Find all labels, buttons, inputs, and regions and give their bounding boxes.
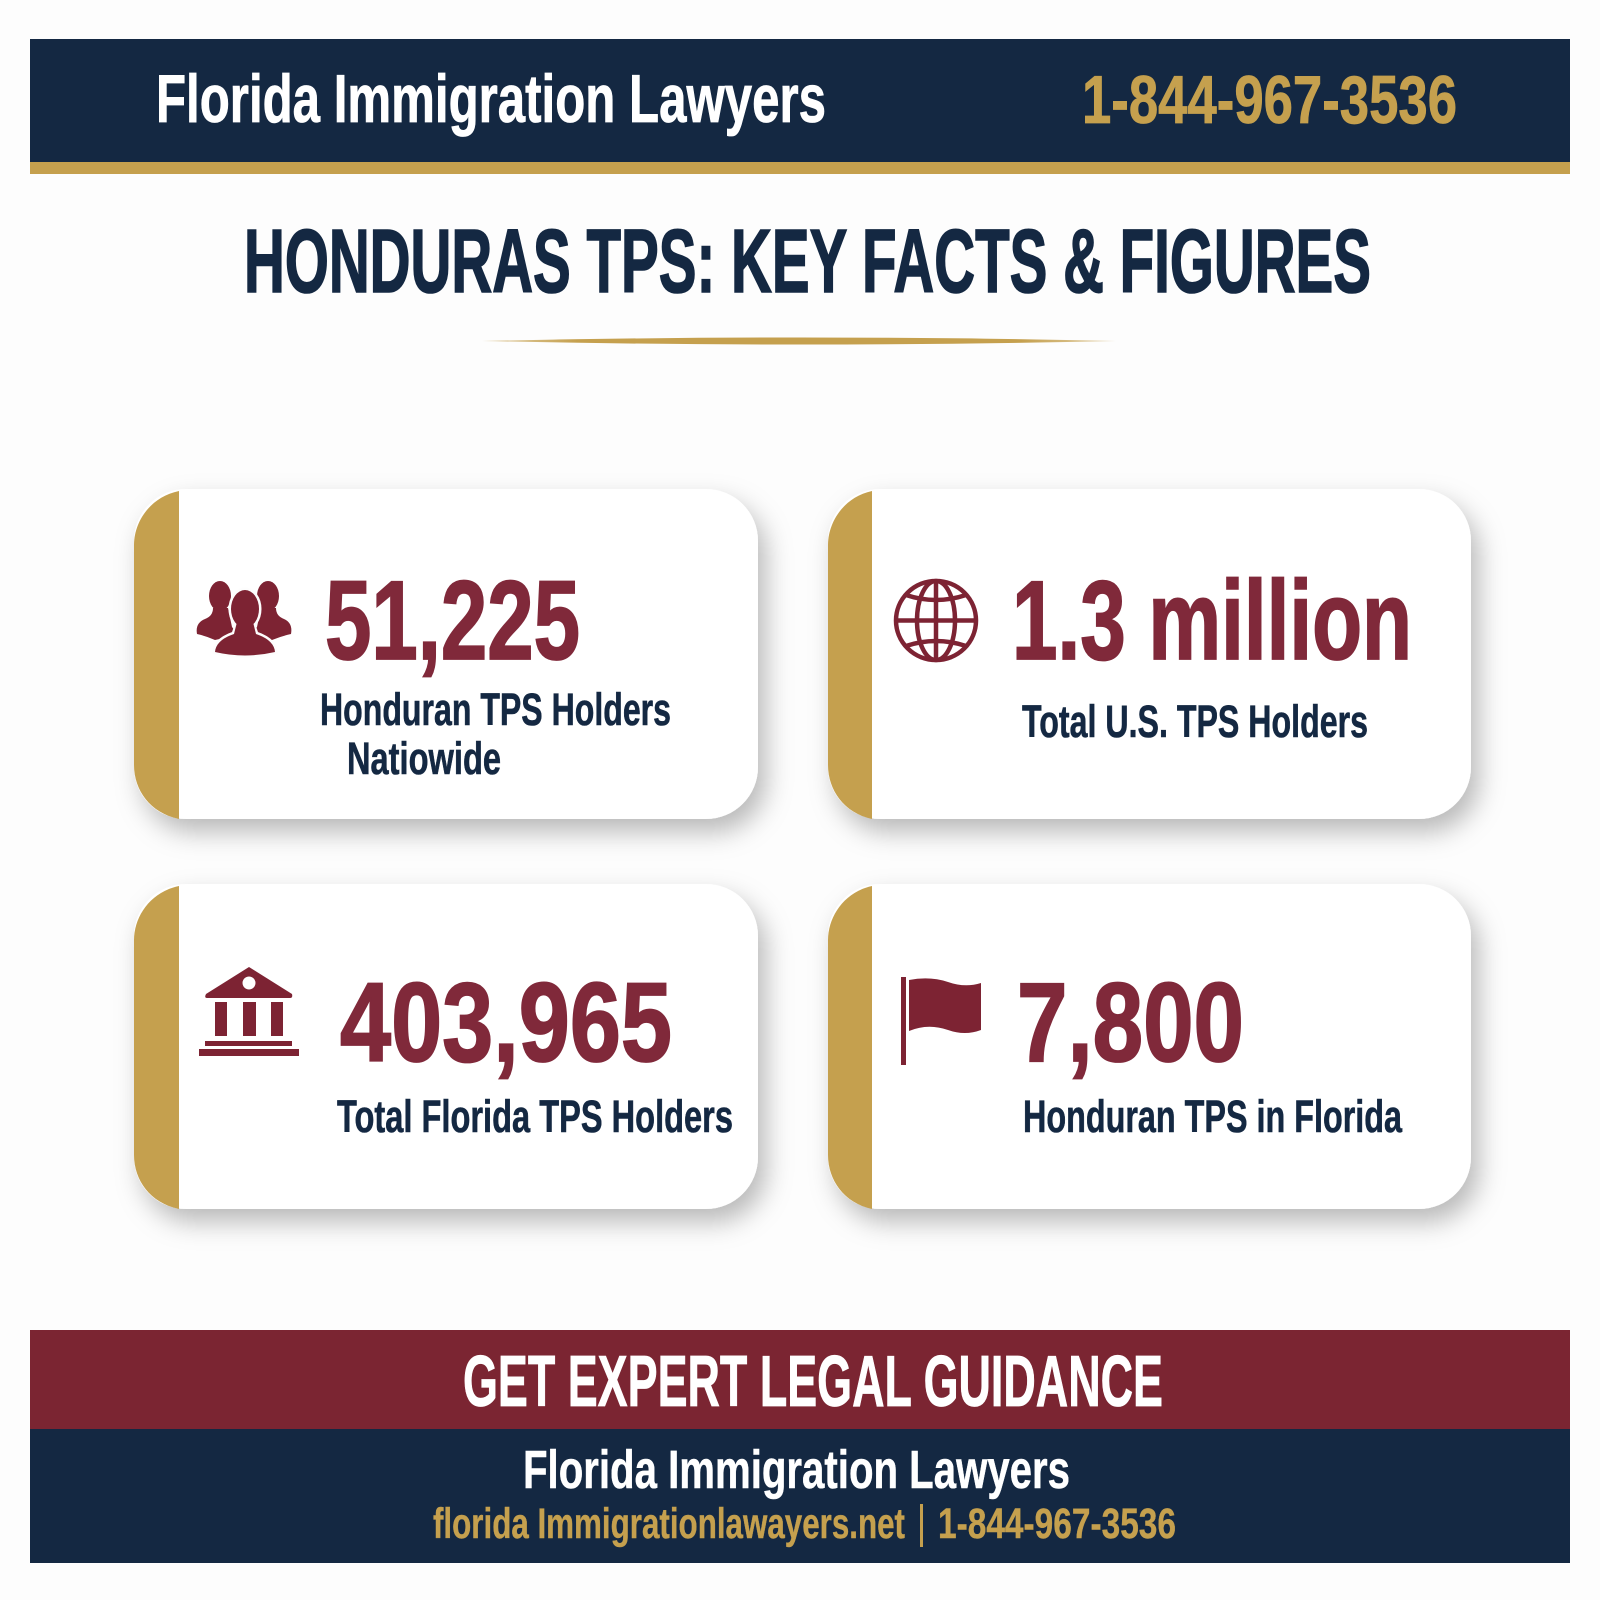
label: Honduran TPS Holders Natiowide: Natiowide xyxy=(347,733,501,784)
stat: 51,225: 51,225 xyxy=(325,558,580,683)
stat: 403,965: 403,965 xyxy=(340,960,672,1085)
panel: total Florida TPS holders xyxy=(134,884,758,1209)
panel: Honduran TPS holders nationwide xyxy=(134,489,758,819)
stat: 7,800: 7,800 xyxy=(1017,960,1244,1085)
icon: people group xyxy=(197,581,291,656)
header band xyxy=(30,39,1570,174)
footer website: florida Immigrationlawayers.net xyxy=(433,1500,905,1548)
label: Honduran TPS in Florida: Honduran TPS in Florida xyxy=(1023,1091,1403,1142)
icon: government building xyxy=(199,967,299,1056)
footer firm name: Florida Immigration Lawyers xyxy=(523,1440,1070,1500)
panel: Honduran TPS in Florida xyxy=(828,884,1471,1209)
footer contact band xyxy=(30,1429,1570,1563)
icon: flag xyxy=(901,977,981,1065)
header firm name: Florida Immigration Lawyers xyxy=(156,61,826,137)
label: Honduran TPS Holders Natiowide xyxy=(320,684,671,784)
panel: total U.S. TPS holders xyxy=(828,489,1471,819)
stat: 1.3 million: 1.3 million xyxy=(1012,558,1412,683)
title underline xyxy=(482,338,1116,344)
label: Honduran TPS Holders Natiowide: Honduran TPS Holders xyxy=(320,684,671,735)
footer call-to-action band xyxy=(30,1330,1570,1429)
icon: globe xyxy=(896,581,976,660)
label: Total Florida TPS Holders: Total Florida TPS Holders xyxy=(337,1091,733,1142)
footer phone number: 1-844-967-3536 xyxy=(938,1500,1176,1548)
label: Total U.S. TPS Holders: Total U.S. TPS Holders xyxy=(1022,696,1368,747)
footer heading: GET EXPERT LEGAL GUIDANCE xyxy=(463,1342,1163,1422)
header phone number: 1-844-967-3536 xyxy=(1082,62,1457,138)
